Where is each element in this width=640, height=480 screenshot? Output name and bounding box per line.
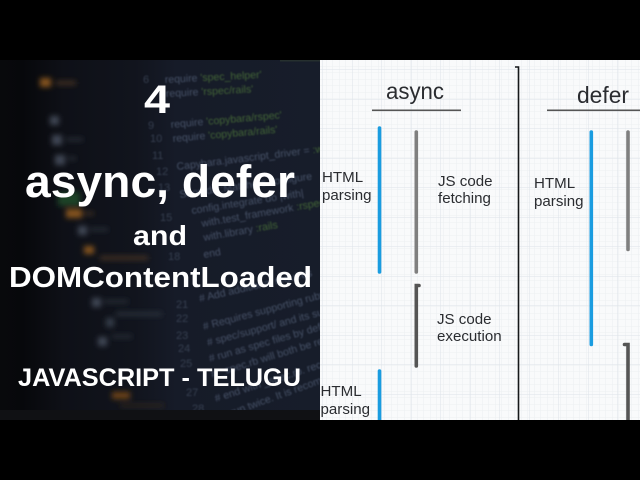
panel: blurred code editor background: run twice. It is recommended <box>229 362 359 419</box>
panel: blurred code editor background: 10 <box>150 133 162 145</box>
panel: blurred code editor background: 11 <box>152 150 163 162</box>
column divider <box>515 67 518 420</box>
panel: blurred code editor background: 15 <box>160 212 172 224</box>
panel: blurred code editor background: require 'rspec/rails' <box>166 83 254 100</box>
number 4: 4 <box>144 78 171 122</box>
label: HTML parsing (async bottom): HTML <box>320 383 362 400</box>
async: JS fetching bar <box>414 132 418 272</box>
label: HTML parsing (async top): HTML <box>322 169 363 186</box>
panel: blurred code editor background: require 'copybara/rails' <box>172 124 278 145</box>
label: JS code execution (async): JS code <box>437 311 492 328</box>
panel: blurred code editor background <box>0 60 320 420</box>
panel: blurred code editor background: 21 <box>176 299 188 311</box>
async: JS execution bar <box>416 286 419 366</box>
panel: blurred code editor background: # run as spec files by default <box>208 317 339 365</box>
async: HTML parsing bar 1 <box>378 128 381 272</box>
panel: blurred code editor background: # Add additional requires <box>198 267 313 305</box>
label: HTML parsing (defer): HTML <box>534 175 575 192</box>
subtitle: JAVASCRIPT - TELUGU: JAVASCRIPT - TELUGU <box>18 364 301 392</box>
heading: async <box>372 86 461 112</box>
defer: JS execution bar <box>624 344 628 424</box>
label: JS code execution (async): execution <box>437 328 502 345</box>
panel: blurred code editor background: 28 <box>192 403 204 415</box>
label: HTML parsing (defer): parsing <box>534 193 584 210</box>
panel: blurred code editor background: with.test_framework :rspec <box>199 196 325 230</box>
panel: blurred code editor background: 12 <box>156 166 168 178</box>
panel: blurred code editor background: with.library :rails <box>201 219 279 244</box>
panel: blurred code editor background: 25 <box>180 358 192 370</box>
panel: blurred code editor background: require 'copybara/rspec' <box>170 109 282 131</box>
title: DOMContentLoaded: DOMContentLoaded <box>9 262 312 294</box>
panel: blurred code editor background: 18 <box>168 251 180 263</box>
title: async, defer: async, defer <box>25 156 295 207</box>
label: JS code fetching (async): fetching <box>438 190 491 207</box>
label: JS code fetching (async): JS code <box>438 173 493 190</box>
panel: blurred code editor background: # Requires supporting ruby files <box>202 283 347 333</box>
panel: blurred code editor background: Capybara.javascript_driver = :webkit <box>176 140 346 173</box>
async: HTML parsing bar 2 <box>378 371 381 424</box>
panel: blurred code editor background: # end with _spec.rb. recommended <box>213 343 373 405</box>
panel: blurred code editor background: 13 <box>158 182 170 194</box>
panel: blurred code editor background: config.integrate do |with| <box>191 187 305 217</box>
panel: blurred code editor background: Shoulda::Matchers.configure <box>179 170 313 201</box>
panel: blurred code editor background: 9 <box>148 120 154 132</box>
heading: async: async <box>386 78 444 104</box>
panel: blurred code editor background: 24 <box>178 343 190 355</box>
panel: blurred code editor background: end <box>202 246 222 261</box>
panel: blurred code editor background: require 'spec_helper' <box>165 69 262 86</box>
heading: defer <box>547 86 640 112</box>
title: and: and <box>133 220 187 251</box>
label: HTML parsing (async bottom): parsing <box>320 401 370 418</box>
panel: blurred code editor background: 23 <box>176 330 188 342</box>
panel: blurred code editor background: 27 <box>186 387 198 399</box>
defer: HTML parsing bar <box>589 132 593 344</box>
label: HTML parsing (async top): parsing <box>322 187 372 204</box>
panel: blurred code editor background: 22 <box>176 313 188 325</box>
defer: JS fetching bar <box>626 132 630 250</box>
panel: blurred code editor background: 6 <box>143 74 149 86</box>
panel: async vs defer timeline diagram <box>320 60 640 424</box>
heading: defer: defer <box>577 82 629 108</box>
panel: blurred code editor background: # _spec.rb will both be required <box>209 327 353 381</box>
panel: blurred code editor background: # spec/support/ and its subdirs <box>206 300 346 349</box>
